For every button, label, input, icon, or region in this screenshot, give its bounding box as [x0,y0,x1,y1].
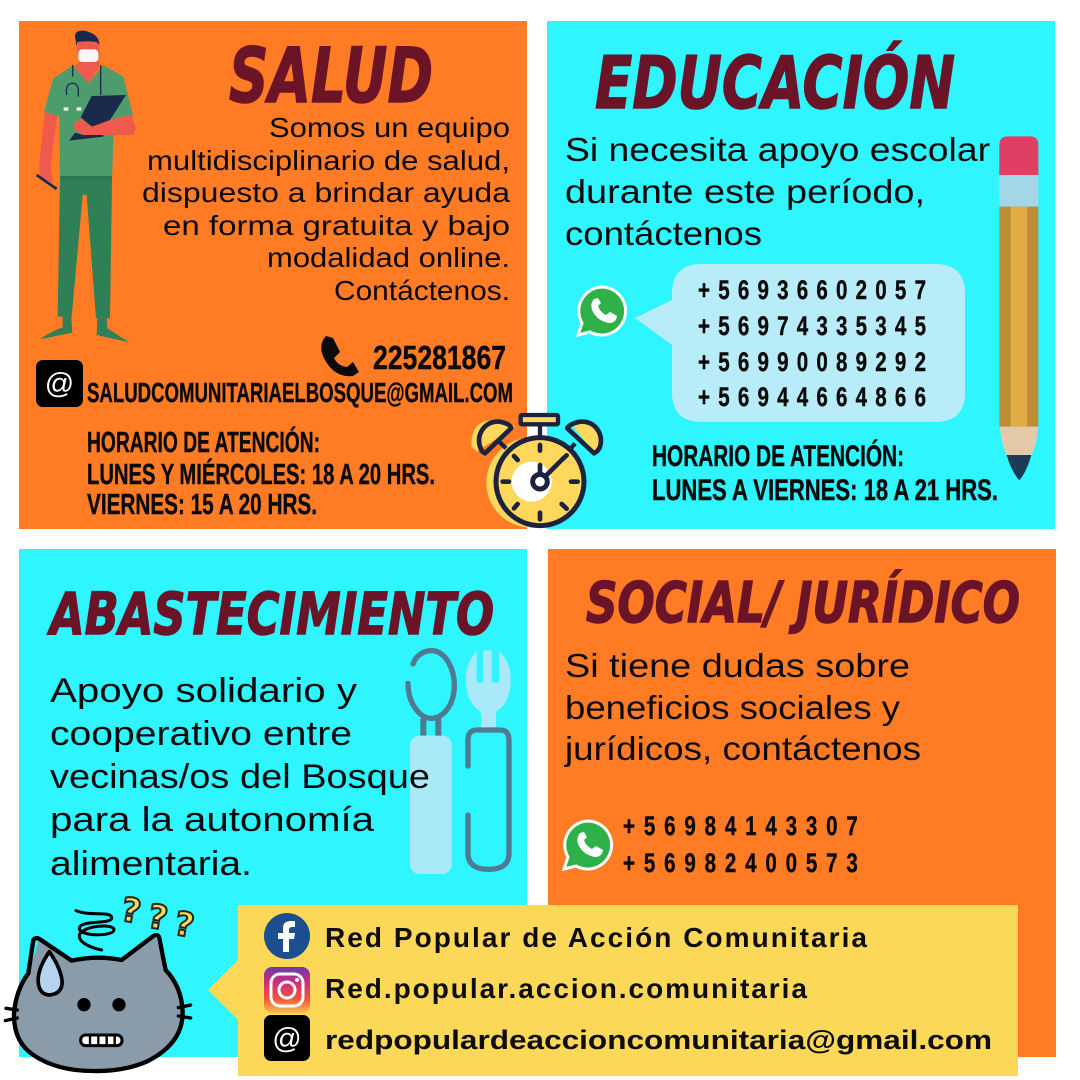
schedule: LUNES Y MIÉRCOLES: 18 A 20 HRS. [87,457,435,491]
heading: abastecimiento: ABASTECIMIENTO [47,580,494,648]
speech bubble with phone numbers [635,264,965,422]
icon: doctor [37,31,136,342]
text: educacion description: Si necesita apoyo escolar [565,131,990,168]
text: salud description: Contáctenos. [334,275,510,306]
text: abastecimiento description: vecinas/os del Bosque [50,758,430,796]
text: social description [564,647,921,767]
icon: facebook [264,913,310,959]
salud background [19,21,527,529]
icon: at sign [264,1015,310,1061]
schedule: HORARIO DE ATENCIÓN: [87,425,320,459]
text: social description: jurídicos, contáctenos [564,730,921,767]
icon: alarm clock [471,415,601,528]
phone numbers: +56984143307 [623,811,858,842]
phone number: 225281867 [373,339,506,376]
email: SALUDCOMUNITARIAELBOSQUE@GMAIL.COM [87,377,513,408]
text: salud description [142,112,510,306]
icon: confused cat: ? [145,896,171,938]
heading: educacion: EDUCACIÓN [595,41,955,125]
schedule [87,425,435,521]
text: educacion description [565,131,990,252]
speech bubble with phone numbers: +56974335345 [698,311,926,342]
text: salud description: Somos un equipo [269,112,510,143]
text: salud description: modalidad online. [267,242,510,273]
panel: social juridico [548,549,1056,1057]
icon: phone [321,336,359,376]
icon: pencil [999,136,1038,480]
text: educacion description: durante este período, [565,173,925,210]
text: social description: Si tiene dudas sobre [565,647,910,684]
text: abastecimiento description [50,672,430,883]
panel: abastecimiento [19,549,527,1057]
text: salud description: dispuesto a brindar ayuda [142,177,510,208]
speech bubble with phone numbers: +56936602057 [698,275,926,306]
text: abastecimiento description: alimentaria. [50,845,252,883]
icon: confused cat: ? [171,904,197,945]
icon: at sign: @ [45,368,74,400]
text: salud description: en forma gratuita y bajo [163,210,510,241]
icon: cutlery [408,651,511,874]
icon: whatsapp [578,287,626,335]
icon: at sign: @ [272,1023,302,1055]
text: abastecimiento description: cooperativo entre [50,715,352,753]
icon: confused cat: ? [118,890,144,931]
text: salud description: multidisciplinario de salud, [147,145,510,176]
icon: instagram [264,967,310,1013]
schedule: VIERNES: 15 A 20 HRS. [87,489,317,521]
phone numbers [623,811,858,879]
email: redpopulardeaccioncomunitaria@gmail.com [325,1025,992,1055]
facebook name: Red Popular de Acción Comunitaria [325,922,867,953]
speech bubble with phone numbers: +56944664866 [698,382,926,413]
icon: whatsapp [564,821,612,869]
icon: at sign [36,360,83,407]
social background [548,549,1056,1057]
text: abastecimiento description: para la autonomía [50,801,374,839]
callout: contact box [208,905,1018,1076]
schedule: HORARIO DE ATENCIÓN: [652,439,904,473]
text: abastecimiento description: Apoyo solidario y [50,672,357,710]
panel: salud [19,21,527,529]
text: social description: beneficios sociales y [565,689,901,726]
abastecimiento background [19,549,527,1057]
instagram name: Red.popular.accion.comunitaria [325,973,807,1004]
educacion background [547,21,1055,529]
panel: educacion [547,21,1055,529]
text: educacion description: contáctenos [565,215,762,252]
schedule [652,439,998,507]
speech bubble with phone numbers: +56990089292 [698,347,926,378]
heading: salud: SALUD [229,31,433,120]
icon: confused cat [5,890,197,1072]
phone numbers: +56982400573 [623,848,858,879]
